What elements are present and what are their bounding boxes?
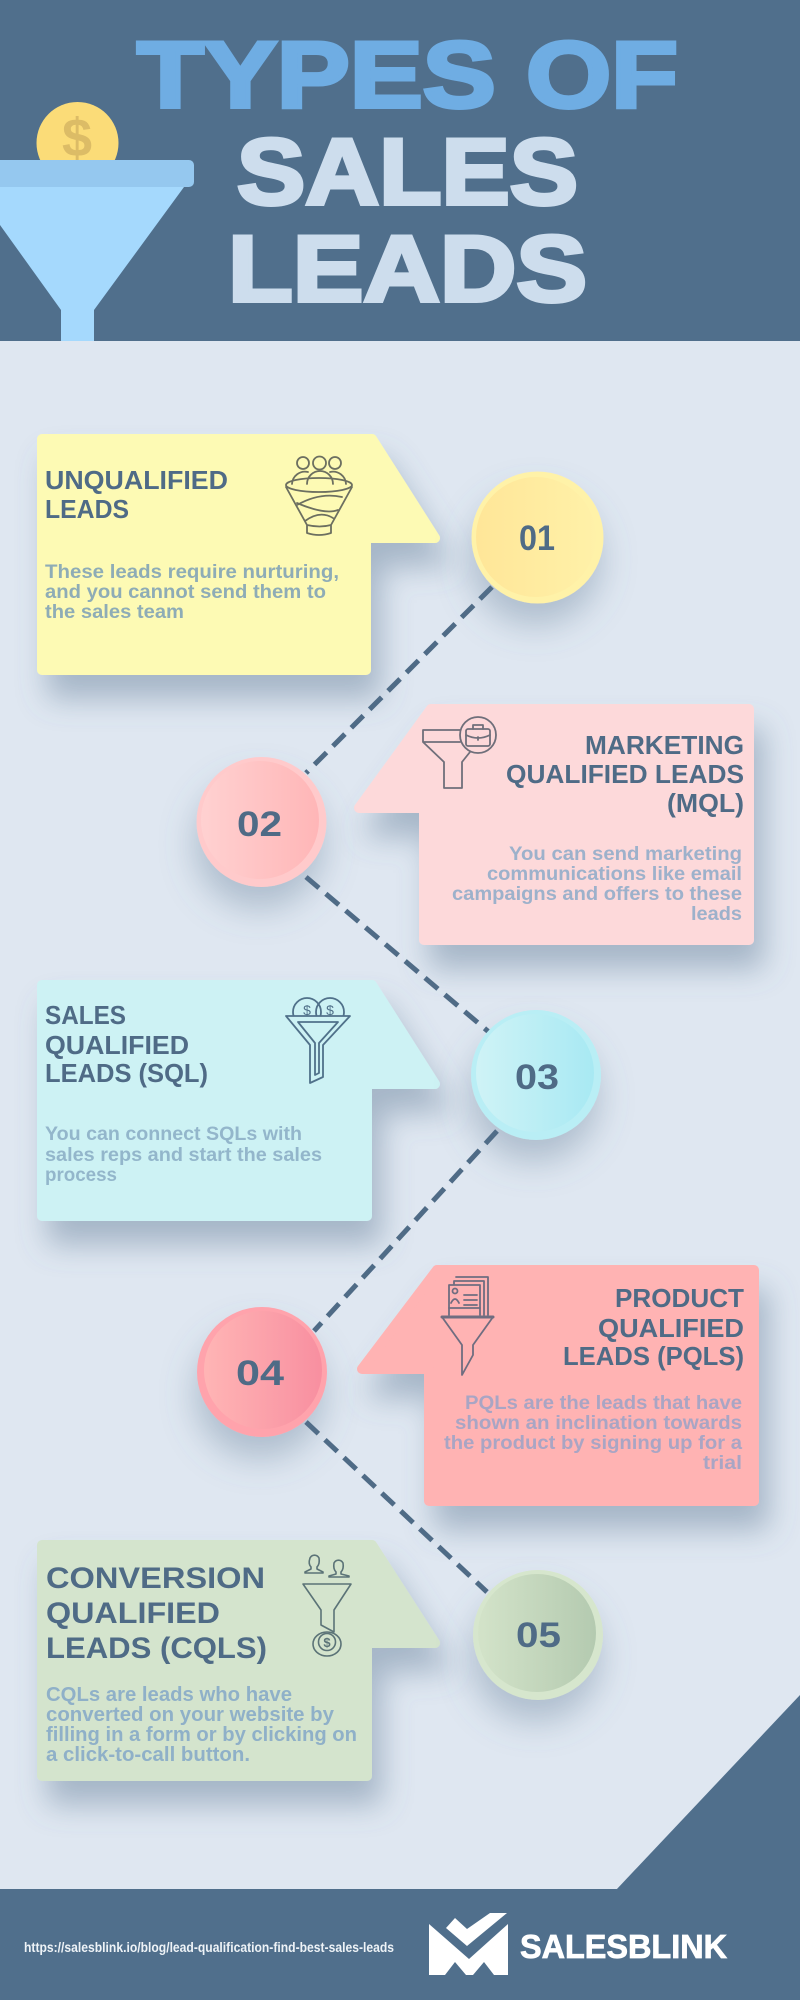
heading: sales qualified leads: SALES xyxy=(45,1000,126,1030)
circle: 03 xyxy=(471,1010,601,1140)
heading: marketing qualified leads: (MQL) xyxy=(667,788,744,818)
title: SALES xyxy=(237,119,578,224)
corner triangle xyxy=(616,1695,800,1890)
circle: 05 xyxy=(473,1570,603,1700)
heading: unqualified leads: LEADS xyxy=(45,494,129,524)
dashed connectors xyxy=(306,587,497,1592)
panel: unqualified leads xyxy=(42,439,435,670)
text: conversion description xyxy=(46,1684,357,1766)
heading: sales qualified leads: QUALIFIED xyxy=(45,1030,189,1060)
heading: product qualified leads: LEADS (PQLS) xyxy=(563,1341,744,1371)
logo wordmark: SALESBLINK xyxy=(520,1928,727,1965)
icon: document funnel xyxy=(442,1277,493,1375)
title: TYPES OF xyxy=(137,22,678,127)
heading: conversion qualified leads: QUALIFIED xyxy=(46,1597,220,1630)
panel: conversion qualified leads xyxy=(42,1545,435,1776)
icon: coins funnel xyxy=(286,998,350,1083)
text: unqualified description: the sales team xyxy=(45,602,184,623)
text: unqualified description: These leads require nurturing, xyxy=(45,562,339,583)
text: sales description: sales reps and start the sales xyxy=(45,1145,322,1166)
circle: 05: 05 xyxy=(516,1616,561,1655)
title: LEADS xyxy=(228,216,587,321)
text: unqualified description xyxy=(45,562,339,623)
icon: people funnel xyxy=(286,456,352,535)
circle: 01: 01 xyxy=(519,519,555,558)
text: marketing description: You can send marketing xyxy=(509,844,742,865)
heading: product qualified leads xyxy=(563,1283,744,1371)
title xyxy=(137,22,678,321)
text: unqualified description: and you cannot send them to xyxy=(45,582,326,603)
heading: sales qualified leads xyxy=(45,1000,208,1088)
panel: product qualified leads xyxy=(362,1270,754,1501)
text: sales description: You can connect SQLs with xyxy=(45,1124,302,1145)
circle: 02 xyxy=(196,757,326,887)
icon: coins funnel: $ xyxy=(303,1002,311,1018)
logo mark xyxy=(429,1913,508,1975)
icon: people funnel coin: $ xyxy=(323,1635,331,1650)
text: product description: trial xyxy=(703,1453,742,1474)
text: product description: PQLs are the leads that have xyxy=(465,1393,742,1414)
heading: sales qualified leads: LEADS (SQL) xyxy=(45,1058,208,1088)
heading: conversion qualified leads: CONVERSION xyxy=(46,1562,265,1595)
circle: 04: 04 xyxy=(236,1354,285,1393)
heading: conversion qualified leads: LEADS (CQLS) xyxy=(46,1632,267,1665)
text: conversion description: a click-to-call button. xyxy=(46,1744,250,1766)
header band xyxy=(0,0,800,341)
text: product description: shown an inclination towards xyxy=(455,1413,742,1434)
heading: unqualified leads xyxy=(45,465,228,524)
footer url: https://salesblink.io/blog/lead-qualification-find-best-sales-leads xyxy=(24,1940,394,1955)
circle: 04 xyxy=(197,1307,327,1437)
icon: coins funnel: $ xyxy=(326,1002,334,1018)
heading: marketing qualified leads: MARKETING xyxy=(585,730,744,760)
heading: unqualified leads: UNQUALIFIED xyxy=(45,465,228,495)
heading: marketing qualified leads xyxy=(506,730,744,818)
icon: people funnel coin xyxy=(303,1555,351,1656)
circle: 03: 03 xyxy=(515,1058,559,1097)
footer band xyxy=(0,1889,800,2000)
text: conversion description: CQLs are leads who have xyxy=(46,1684,292,1706)
logo: salesblink xyxy=(429,1913,727,1975)
icon: funnel with coin xyxy=(0,102,194,341)
circle: 02: 02 xyxy=(237,805,282,844)
icon: funnel with coin: $ xyxy=(62,108,92,168)
icon: briefcase funnel xyxy=(423,717,496,788)
circle: 01 xyxy=(472,472,604,604)
text: sales description: process xyxy=(45,1165,117,1186)
text: sales description xyxy=(45,1124,322,1186)
heading: conversion qualified leads xyxy=(46,1562,267,1665)
text: product description: the product by signing up for a xyxy=(444,1433,742,1454)
text: marketing description: campaigns and offers to these xyxy=(452,884,742,905)
text: product description xyxy=(444,1393,742,1474)
text: marketing description: communications like email xyxy=(487,864,742,885)
panel: marketing qualified leads xyxy=(359,709,749,940)
panel: sales qualified leads xyxy=(42,985,435,1216)
text: conversion description: converted on your website by xyxy=(46,1704,335,1726)
heading: product qualified leads: PRODUCT xyxy=(615,1283,744,1313)
text: marketing description xyxy=(452,844,742,925)
heading: marketing qualified leads: QUALIFIED LEADS xyxy=(506,759,744,789)
text: marketing description: leads xyxy=(691,904,742,925)
text: conversion description: filling in a form or by clicking on xyxy=(46,1724,357,1746)
heading: product qualified leads: QUALIFIED xyxy=(598,1313,744,1343)
